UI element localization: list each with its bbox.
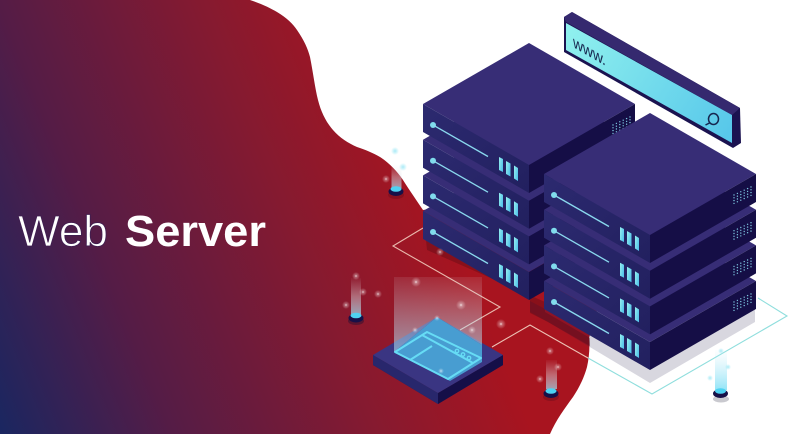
server stack: right [544, 113, 756, 370]
server stack: left [423, 43, 635, 300]
hologram panel [394, 317, 482, 381]
circuit lines [393, 228, 787, 394]
floor shadows [426, 240, 755, 383]
title: Server [125, 207, 266, 256]
emitter: bottom centre [543, 360, 559, 401]
title: Web [18, 207, 108, 256]
chip with hologram window [373, 277, 503, 404]
hologram beam [394, 277, 482, 352]
icon: magnifier [706, 114, 718, 125]
sparkles [342, 147, 731, 383]
title [18, 207, 266, 256]
red wave blob [0, 0, 600, 434]
emitter: right [713, 350, 729, 402]
window icon [395, 332, 481, 379]
emitter: left [348, 278, 364, 325]
emitter: top [388, 165, 404, 199]
search bar [564, 12, 741, 148]
www label: www. [572, 33, 606, 70]
